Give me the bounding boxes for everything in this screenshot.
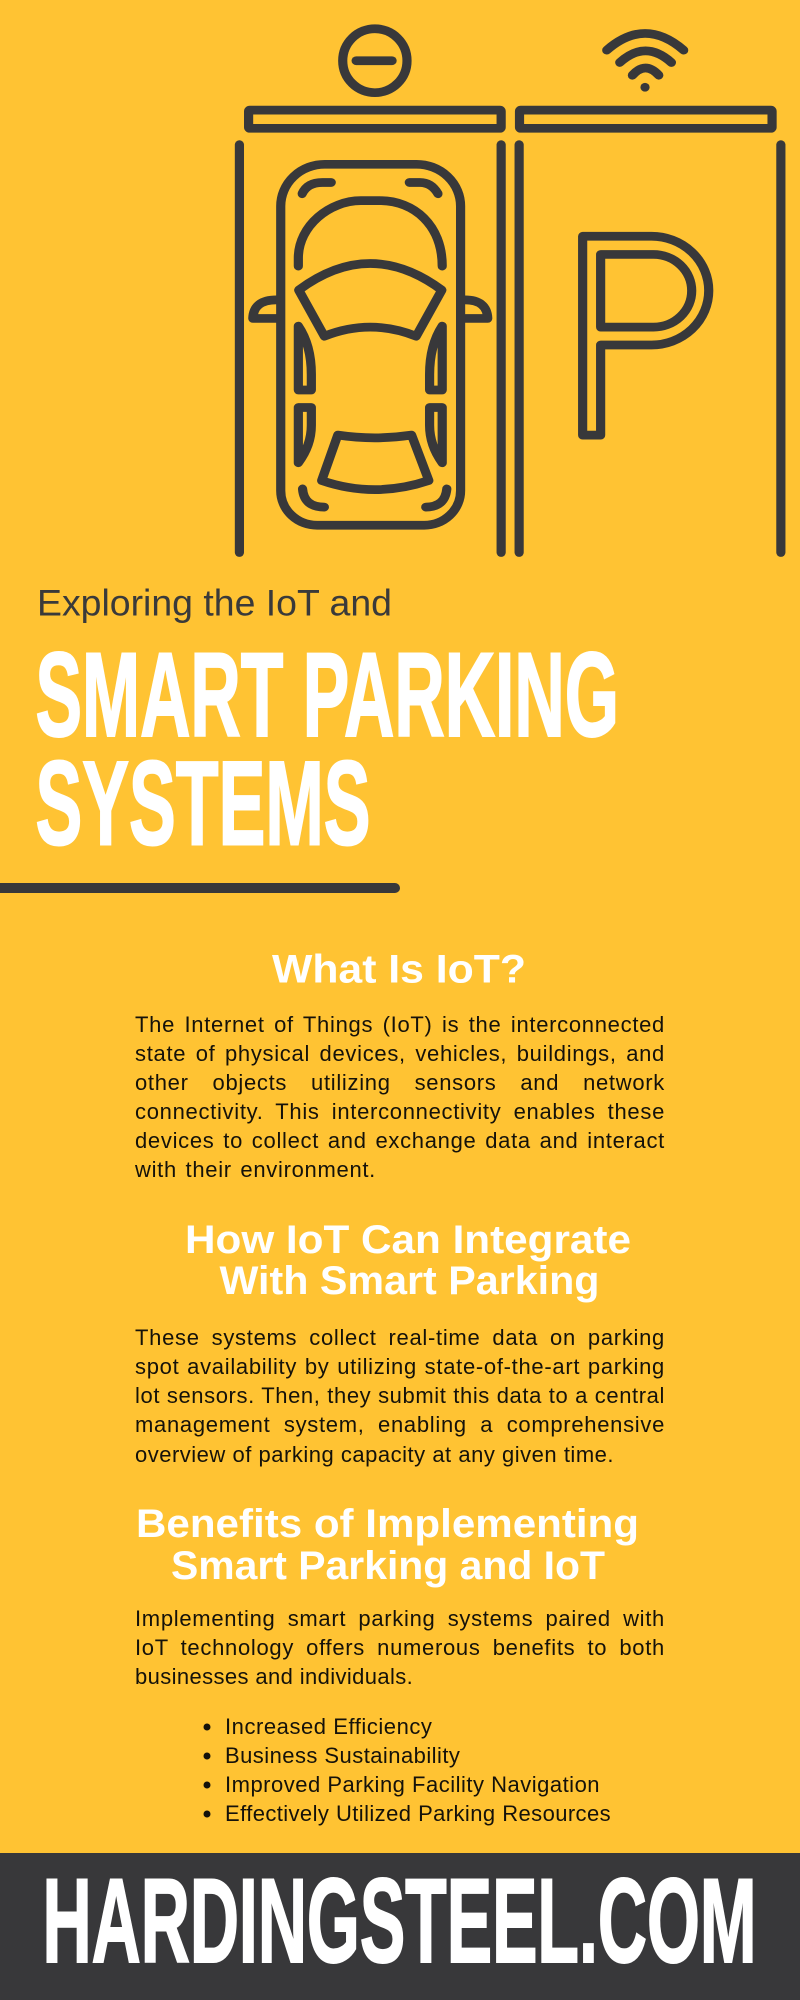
bullet list: benefits: Business Sustainability	[225, 1743, 460, 1768]
heading: Benefits of Implementing Smart Parking and IoT	[136, 1502, 639, 1588]
heading: What Is IoT: What Is IoT?	[272, 948, 526, 992]
text block: what is IoT: with their environment.	[135, 1157, 376, 1182]
parking bay lines	[239, 145, 781, 553]
heading: How IoT Can Integrate With Smart Parking: With Smart Parking	[220, 1259, 600, 1303]
left sign plate	[249, 110, 501, 128]
heading: Benefits of Implementing Smart Parking and IoT: Benefits of Implementing	[136, 1502, 639, 1546]
text block: what is IoT: connectivity. This interconnectivity enables these	[135, 1099, 665, 1124]
text block: what is IoT	[135, 1012, 665, 1182]
heading: How IoT Can Integrate With Smart Parking: How IoT Can Integrate	[185, 1218, 631, 1262]
text block: how IoT integrates	[135, 1325, 665, 1467]
footer band	[0, 1853, 800, 2000]
text block: benefits intro: IoT technology offers numerous benefits to both	[135, 1635, 665, 1660]
bullet list: benefits: Improved Parking Facility Navigation	[225, 1772, 600, 1797]
text block: what is IoT: The Internet of Things (IoT) is the interconnected	[135, 1012, 665, 1037]
text block: benefits intro: businesses and individuals.	[135, 1664, 413, 1689]
illustration: parking spaces with car	[239, 29, 781, 553]
bullet list: benefits	[225, 1714, 611, 1826]
text block: how IoT integrates: overview of parking capacity at any given time.	[135, 1442, 614, 1467]
text block: how IoT integrates: These systems collect real-time data on parking	[135, 1325, 665, 1350]
bullet list: benefits: Increased Efficiency	[225, 1714, 432, 1739]
text block: what is IoT: devices to collect and exchange data and interact	[135, 1128, 665, 1153]
text block: benefits intro: Implementing smart parking systems paired with	[135, 1606, 665, 1631]
icon: wifi signal	[607, 33, 684, 92]
text block: how IoT integrates: management system, enabling a comprehensive	[135, 1412, 665, 1437]
text block: how IoT integrates: spot availability by utilizing state-of-the-art parking	[135, 1354, 665, 1379]
text block: what is IoT: state of physical devices, vehicles, buildings, and	[135, 1041, 665, 1066]
subtitle: Exploring the IoT and	[37, 582, 392, 624]
text block: benefits intro	[135, 1606, 665, 1689]
icon: no entry sign	[343, 29, 407, 93]
icon: car top view	[253, 164, 488, 525]
list bullets	[204, 1724, 210, 1818]
heading: Benefits of Implementing Smart Parking and IoT: Smart Parking and IoT	[171, 1544, 605, 1588]
icon: letter P parking sign	[583, 236, 709, 435]
text block: what is IoT: other objects utilizing sensors and network	[135, 1070, 665, 1095]
text block: how IoT integrates: lot sensors. Then, they submit this data to a central	[135, 1383, 665, 1408]
divider bar	[0, 883, 400, 893]
title line 2: SYSTEMS	[36, 736, 370, 870]
bullet list: benefits: Effectively Utilized Parking Resources	[225, 1801, 611, 1826]
right sign plate	[520, 110, 772, 128]
heading: How IoT Can Integrate With Smart Parking	[185, 1218, 631, 1303]
